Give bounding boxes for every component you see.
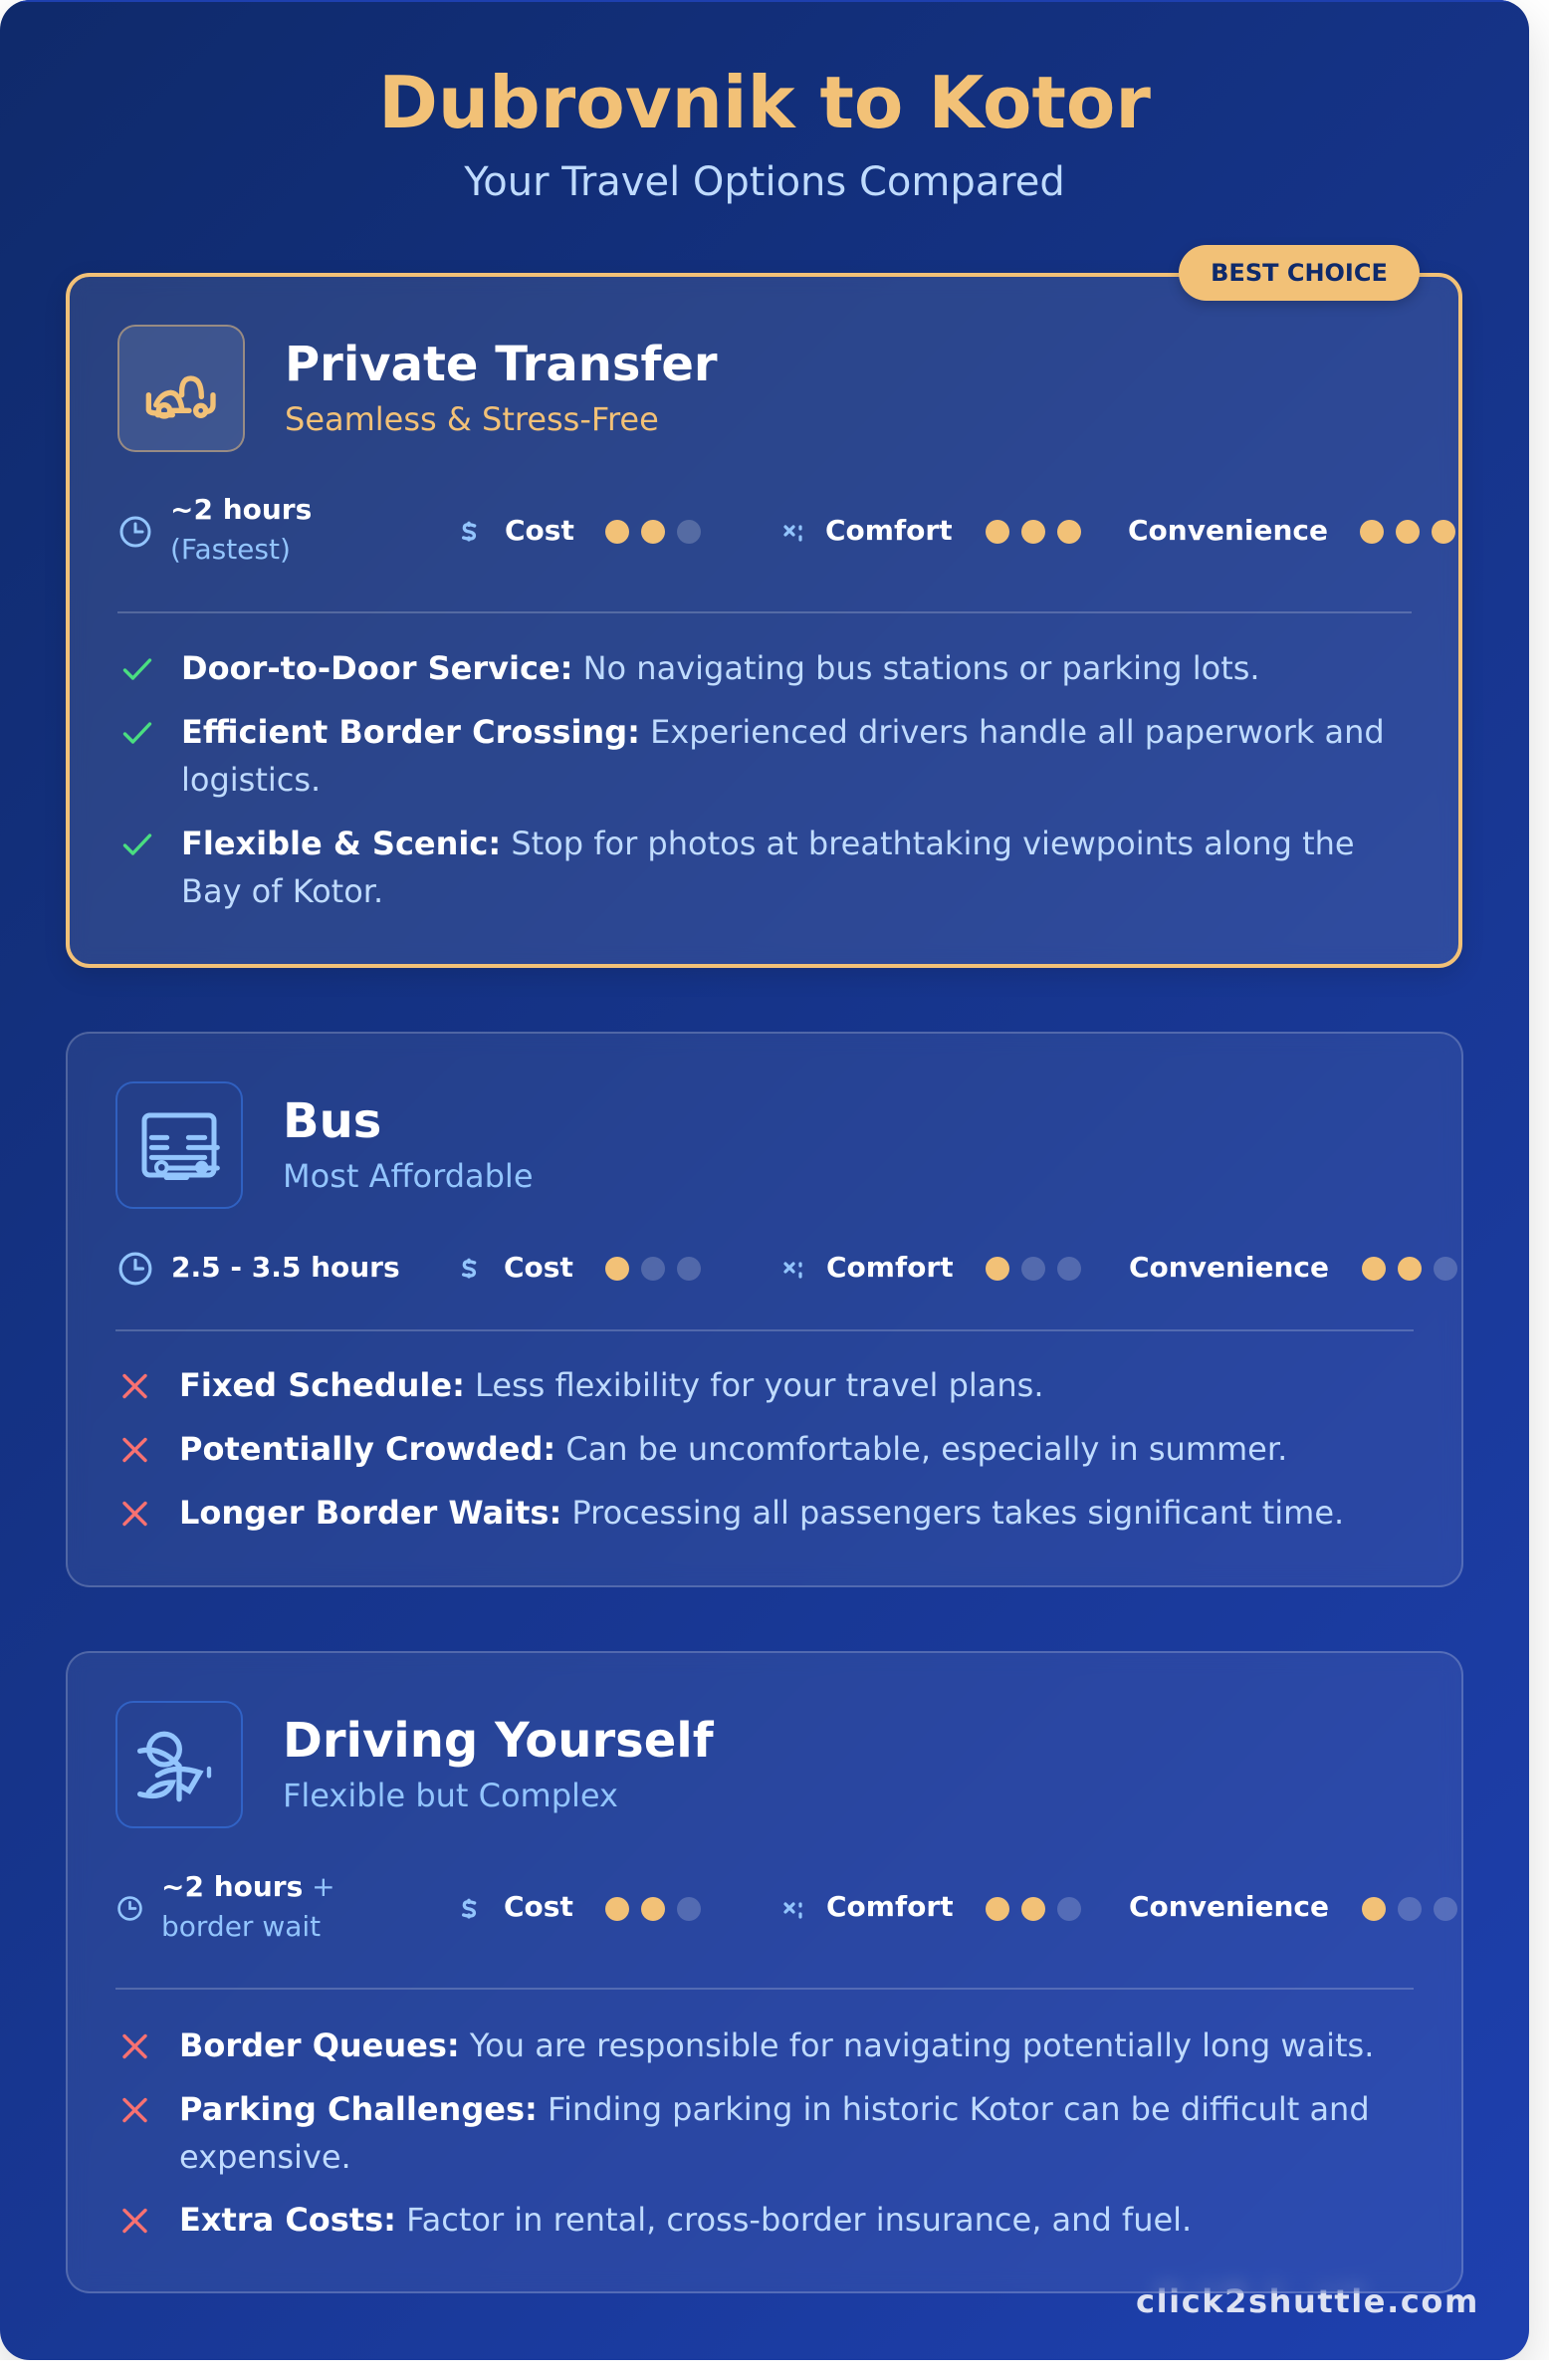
list: bus drawbacks: Fixed Schedule: Less flexibility for your travel plans. xyxy=(179,1366,1043,1404)
comfort label: Comfort xyxy=(826,1890,954,1923)
subtitle: Your Travel Options Compared xyxy=(464,159,1065,205)
list: driving drawbacks: Extra Costs: Factor in rental, cross-border insurance, and fuel. xyxy=(179,2201,1192,2239)
time: ~2 hours xyxy=(170,493,312,526)
cost rating xyxy=(605,1257,701,1281)
time note: border wait xyxy=(161,1910,321,1943)
time note: (Fastest) xyxy=(170,533,291,566)
convenience label: Convenience xyxy=(1129,1890,1329,1923)
list: private transfer benefits: Efficient Border Crossing: Experienced drivers handle all paperwork and xyxy=(181,713,1385,751)
heading: private transfer: Private Transfer xyxy=(285,337,718,392)
icon box: driving xyxy=(115,1701,243,1828)
list: driving drawbacks: Parking Challenges: Finding parking in historic Kotor can be difficult and xyxy=(179,2090,1370,2128)
driving glyph xyxy=(137,1731,211,1802)
list: private transfer benefits xyxy=(181,649,1385,910)
subheading: Most Affordable xyxy=(283,1157,534,1195)
cross icons xyxy=(122,2033,147,2233)
convenience rating xyxy=(1362,1897,1457,1921)
panel: bus xyxy=(66,1032,1463,1587)
cost icon xyxy=(462,1898,476,1919)
comfort icon xyxy=(783,1262,802,1279)
convenience rating xyxy=(1362,1257,1457,1281)
clock icon xyxy=(119,516,151,548)
badge: best choice: BEST CHOICE xyxy=(1211,259,1388,287)
subheading: Seamless & Stress-Free xyxy=(285,400,659,438)
list: bus drawbacks: Potentially Crowded: Can be uncomfortable, especially in summer. xyxy=(179,1430,1287,1468)
bus glyph xyxy=(141,1113,220,1180)
subheading: Flexible but Complex xyxy=(283,1777,618,1814)
list: private transfer benefits: logistics. xyxy=(181,761,321,799)
cross icons xyxy=(122,1374,147,1526)
cost label: Cost xyxy=(505,514,574,547)
list: private transfer benefits: Bay of Kotor. xyxy=(181,872,383,910)
convenience rating xyxy=(1360,520,1455,544)
time: 2.5 - 3.5 hours xyxy=(171,1251,400,1284)
clock icon xyxy=(117,1896,142,1921)
cost rating xyxy=(605,1897,701,1921)
comfort rating xyxy=(986,1897,1384,1921)
check icons xyxy=(123,658,151,855)
heading: driving yourself: Driving Yourself xyxy=(283,1713,714,1769)
comfort label: Comfort xyxy=(826,1251,954,1284)
title: Dubrovnik to Kotor xyxy=(378,61,1151,144)
heading: bus: Bus xyxy=(283,1093,381,1149)
panel: driving yourself xyxy=(66,1651,1463,2293)
clock icon xyxy=(119,1253,151,1285)
comfort icon xyxy=(783,525,802,542)
list: private transfer benefits: Door-to-Door Service: No navigating bus stations or parking lots. xyxy=(181,649,1260,687)
convenience label: Convenience xyxy=(1129,1251,1329,1284)
icon: car xyxy=(117,325,245,452)
comfort label: Comfort xyxy=(825,514,953,547)
list: bus drawbacks: Longer Border Waits: Processing all passengers takes significant time. xyxy=(179,1494,1344,1532)
list: driving drawbacks: expensive. xyxy=(179,2138,351,2176)
badge: best choice xyxy=(1179,245,1420,301)
list: bus drawbacks xyxy=(179,1366,1344,1532)
icon box: bus xyxy=(115,1081,243,1209)
cost icon xyxy=(462,1259,476,1279)
comfort rating xyxy=(986,520,1081,544)
comfort icon xyxy=(783,1902,802,1919)
comfort rating xyxy=(986,1257,1384,1281)
cost rating xyxy=(605,520,701,544)
convenience label: Convenience xyxy=(1128,514,1328,547)
footer brand: click2shuttle.com xyxy=(1136,2282,1479,2320)
cost icon xyxy=(462,520,1453,544)
time: ~2 hours + xyxy=(161,1870,335,1903)
cost label: Cost xyxy=(504,1251,573,1284)
car glyph xyxy=(145,375,216,419)
list: driving drawbacks: Border Queues: You are responsible for navigating potentially long waits. xyxy=(179,2026,1374,2064)
panel: private transfer xyxy=(66,273,1462,968)
cost label: Cost xyxy=(504,1890,573,1923)
list: private transfer benefits: Flexible & Scenic: Stop for photos at breathtaking viewpoints along the xyxy=(181,825,1355,862)
